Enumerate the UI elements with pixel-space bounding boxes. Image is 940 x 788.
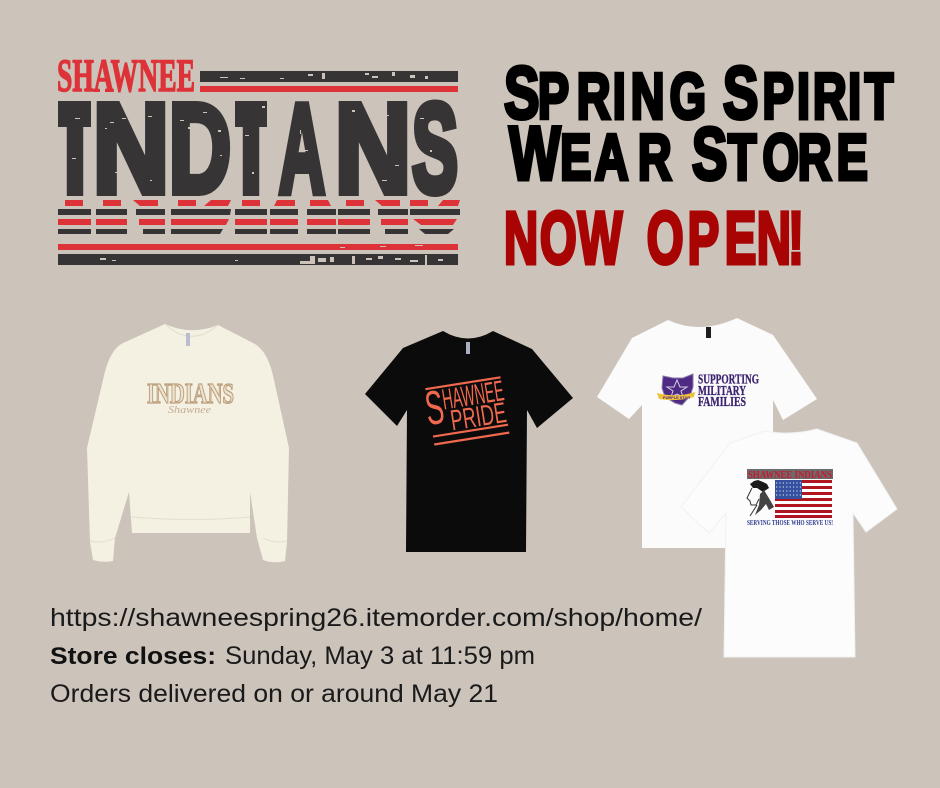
white tee front body bbox=[597, 318, 817, 548]
logo word: Indians: S bbox=[412, 78, 458, 219]
product: cream sweatshirt bbox=[87, 324, 289, 562]
sweatshirt print: Shawnee: Shawnee bbox=[168, 404, 211, 416]
badge ribbon bbox=[657, 392, 695, 400]
headline line 2: WEAR STORE bbox=[509, 112, 868, 197]
store closing date: Sunday, May 3 at 11:59 pm bbox=[225, 642, 535, 670]
delivery date: Orders delivered on or around May 21 bbox=[50, 680, 498, 708]
logo word: Indians: N bbox=[335, 78, 411, 219]
sweatshirt print: Indians: INDIANS bbox=[147, 378, 234, 410]
print: Shawnee: HAWNEE bbox=[440, 375, 506, 416]
badge state shape bbox=[662, 374, 693, 405]
product: white tee back bbox=[681, 429, 897, 657]
logo bottom stripes bbox=[58, 244, 458, 265]
logo word: Shawnee: SHAWNEE bbox=[57, 50, 195, 102]
logo word: Indians: D bbox=[169, 78, 231, 219]
logo word: Indians: I bbox=[64, 78, 86, 219]
headline: Now Open: NOW OPEN! bbox=[504, 198, 804, 280]
white tee front tag bbox=[706, 327, 711, 338]
sweatshirt collar and rib lines bbox=[90, 324, 287, 542]
badge text: PURPLE STAR bbox=[663, 395, 690, 400]
headline line 1: SPRING SPIRIT bbox=[504, 52, 893, 135]
sweatshirt tag bbox=[186, 333, 190, 346]
store closing label: Store closes: bbox=[50, 643, 216, 670]
product: black Shawnee Pride tee bbox=[365, 331, 573, 552]
print: Pride: PRIDE bbox=[448, 397, 509, 437]
store URL: https://shawneespring26.itemorder.com/shop/home/ bbox=[50, 604, 702, 632]
icon: American flag bbox=[775, 480, 832, 518]
tee text: Supporting Military Families: SUPPORTING bbox=[698, 372, 759, 388]
icon: mascot head bbox=[747, 480, 774, 516]
store details text bbox=[50, 604, 702, 708]
product: white tee front bbox=[597, 318, 817, 548]
print stripes bbox=[425, 377, 509, 444]
white tee back body bbox=[681, 429, 897, 657]
logo word: Indians bbox=[58, 78, 458, 219]
tee text: Supporting Military Families: MILITARY bbox=[698, 384, 746, 399]
badge star bbox=[667, 380, 687, 397]
logo distressed texture bbox=[72, 72, 443, 265]
tee text: Serving Those Who Serve Us: SERVING THOSE WHO SERVE US! bbox=[747, 519, 833, 527]
sweatshirt body bbox=[87, 324, 289, 562]
logo word: Indians: N bbox=[93, 78, 169, 219]
logo top stripes bbox=[200, 71, 458, 92]
logo sliced letter reflection bbox=[58, 200, 460, 234]
black tee print bbox=[422, 371, 510, 445]
logo word: Indians: I bbox=[240, 78, 262, 219]
tee banner: Shawnee Indians: SHAWNEE INDIANS bbox=[748, 469, 832, 481]
logo word: Indians: A bbox=[279, 78, 325, 219]
print: large S: S bbox=[422, 381, 448, 436]
black tee tag bbox=[466, 342, 470, 354]
black tee body bbox=[365, 331, 573, 552]
tee text: Supporting Military Families bbox=[698, 372, 759, 410]
tee text: Supporting Military Families: FAMILIES bbox=[698, 395, 746, 410]
logo: Shawnee Indians bbox=[57, 50, 460, 265]
badge: Ohio Purple Star bbox=[657, 374, 695, 405]
headline: Spring Spirit Wear Store bbox=[504, 52, 893, 197]
